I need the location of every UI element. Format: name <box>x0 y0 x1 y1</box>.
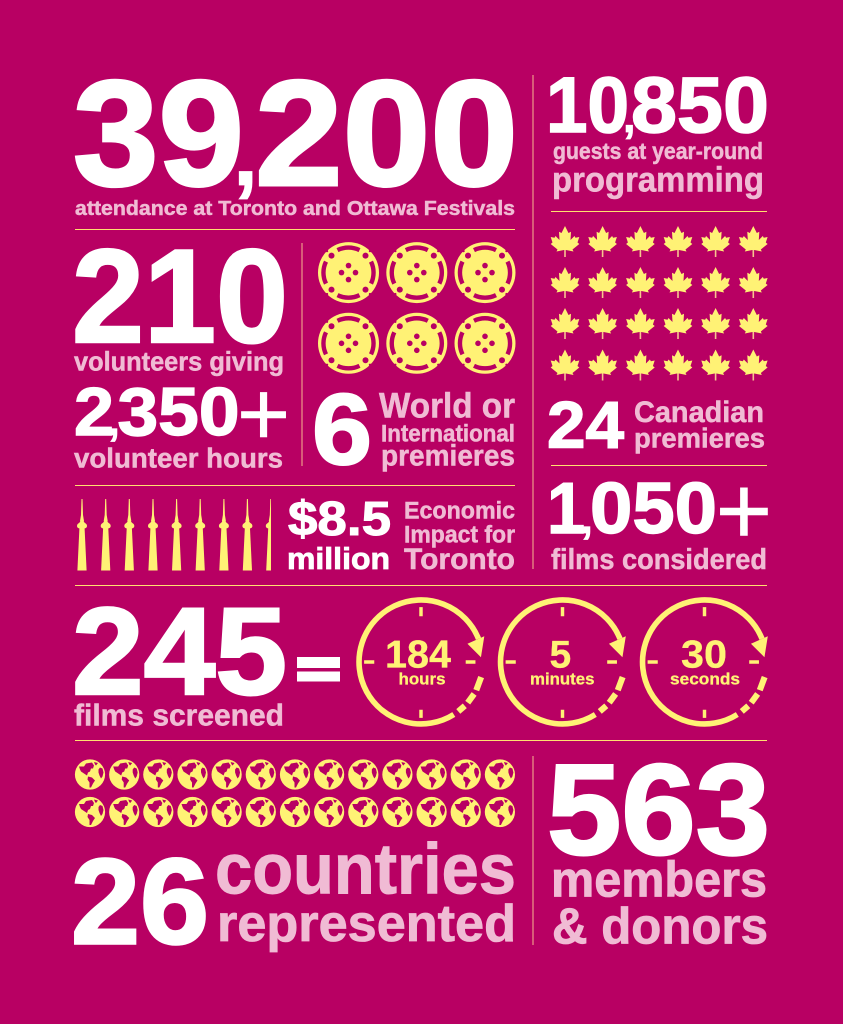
clock: 30 seconds <box>643 600 768 724</box>
clock: 5 minutes: minutes <box>530 670 594 689</box>
clock: 30 seconds: 30 <box>681 634 727 676</box>
stat: 210 volunteers: 210 <box>72 223 288 371</box>
icons: globes <box>75 759 515 827</box>
clock: 30 seconds: seconds <box>670 670 740 689</box>
stat: 39,200 attendance: 200 <box>255 49 518 217</box>
stat: 210 volunteers: + <box>237 364 290 465</box>
stat: 563 members and donors <box>547 738 770 954</box>
stat: 26 countries represented <box>71 830 516 970</box>
equals sign <box>297 657 340 682</box>
number: 2,350+: 2 <box>74 374 114 450</box>
stat: 24 Canadian premieres <box>547 388 765 462</box>
icons: maple leaves <box>551 226 768 380</box>
stat: 10,850 guests <box>546 60 769 200</box>
caption: films considered: films considered <box>551 544 767 576</box>
stat: 26 countries represented: 26 <box>71 834 209 970</box>
caption: Canadian: Canadian <box>634 396 764 429</box>
stat: 39,200 attendance <box>73 49 518 220</box>
caption: premieres: premieres <box>381 440 515 472</box>
clock: 184 hours: 184 <box>385 634 451 676</box>
stat: 10,850 guests: 850 <box>631 60 769 149</box>
caption: Impact for: Impact for <box>404 522 515 548</box>
stat: 1,050+ films considered: 050 <box>590 469 717 549</box>
caption: guests at year-round: guests at year-round <box>553 138 763 164</box>
caption: and donors: & donors <box>552 897 768 954</box>
stat: 39,200 attendance: , <box>233 105 258 205</box>
caption: represented: represented <box>217 895 516 953</box>
label: million: million <box>287 541 390 576</box>
stat: 6 world premieres: 6 <box>312 374 372 486</box>
stat: 210 volunteers: 350 <box>118 374 240 450</box>
caption: World or: World or <box>379 386 515 426</box>
stat: 1,050+ films considered: 1 <box>547 469 585 549</box>
clock: 5 minutes <box>501 600 626 724</box>
caption: members: members <box>551 852 767 908</box>
caption: volunteers giving: volunteers giving <box>74 346 284 376</box>
stat: 10,850 guests: 10 <box>546 60 629 149</box>
clock: 184 hours <box>359 600 484 724</box>
stat: 563 members and donors: 563 <box>547 738 770 882</box>
stat: $8.5 million economic impact: $8.5 <box>288 493 391 546</box>
caption: Toronto: Toronto <box>404 543 515 576</box>
stat: 6 world premieres <box>312 374 515 486</box>
stat: 24 Canadian premieres: 24 <box>547 388 624 462</box>
clock: 184 hours: hours <box>398 670 446 689</box>
caption: premieres: premieres <box>634 422 765 454</box>
icons: CN towers <box>77 499 276 570</box>
caption: attendance: attendance at Toronto and Ottawa Festivals <box>75 197 515 220</box>
caption: International: International <box>381 420 515 448</box>
stat: 210 volunteers <box>72 223 290 474</box>
stat: 210 volunteers: , <box>108 397 120 444</box>
stat: $8.5 million economic impact <box>287 493 515 576</box>
stat: 39,200 attendance: 39 <box>73 49 244 217</box>
caption: countries: countries <box>215 830 516 910</box>
stat: 245 films screened: 245 <box>72 583 287 721</box>
stat: 1,050+ films considered: , <box>581 495 593 542</box>
stat: 1,050+ films considered: + <box>716 456 772 565</box>
icons: film reels <box>318 242 516 374</box>
caption: films screened: films screened <box>74 698 284 732</box>
stat: 1,050+ films considered <box>547 456 772 576</box>
clock: 5 minutes: 5 <box>550 634 571 676</box>
caption: volunteer hours: volunteer hours <box>74 442 283 474</box>
caption: Economic: Economic <box>404 498 515 524</box>
caption: programming: programming <box>552 160 764 200</box>
stat: 10,850 guests: , <box>623 91 636 142</box>
